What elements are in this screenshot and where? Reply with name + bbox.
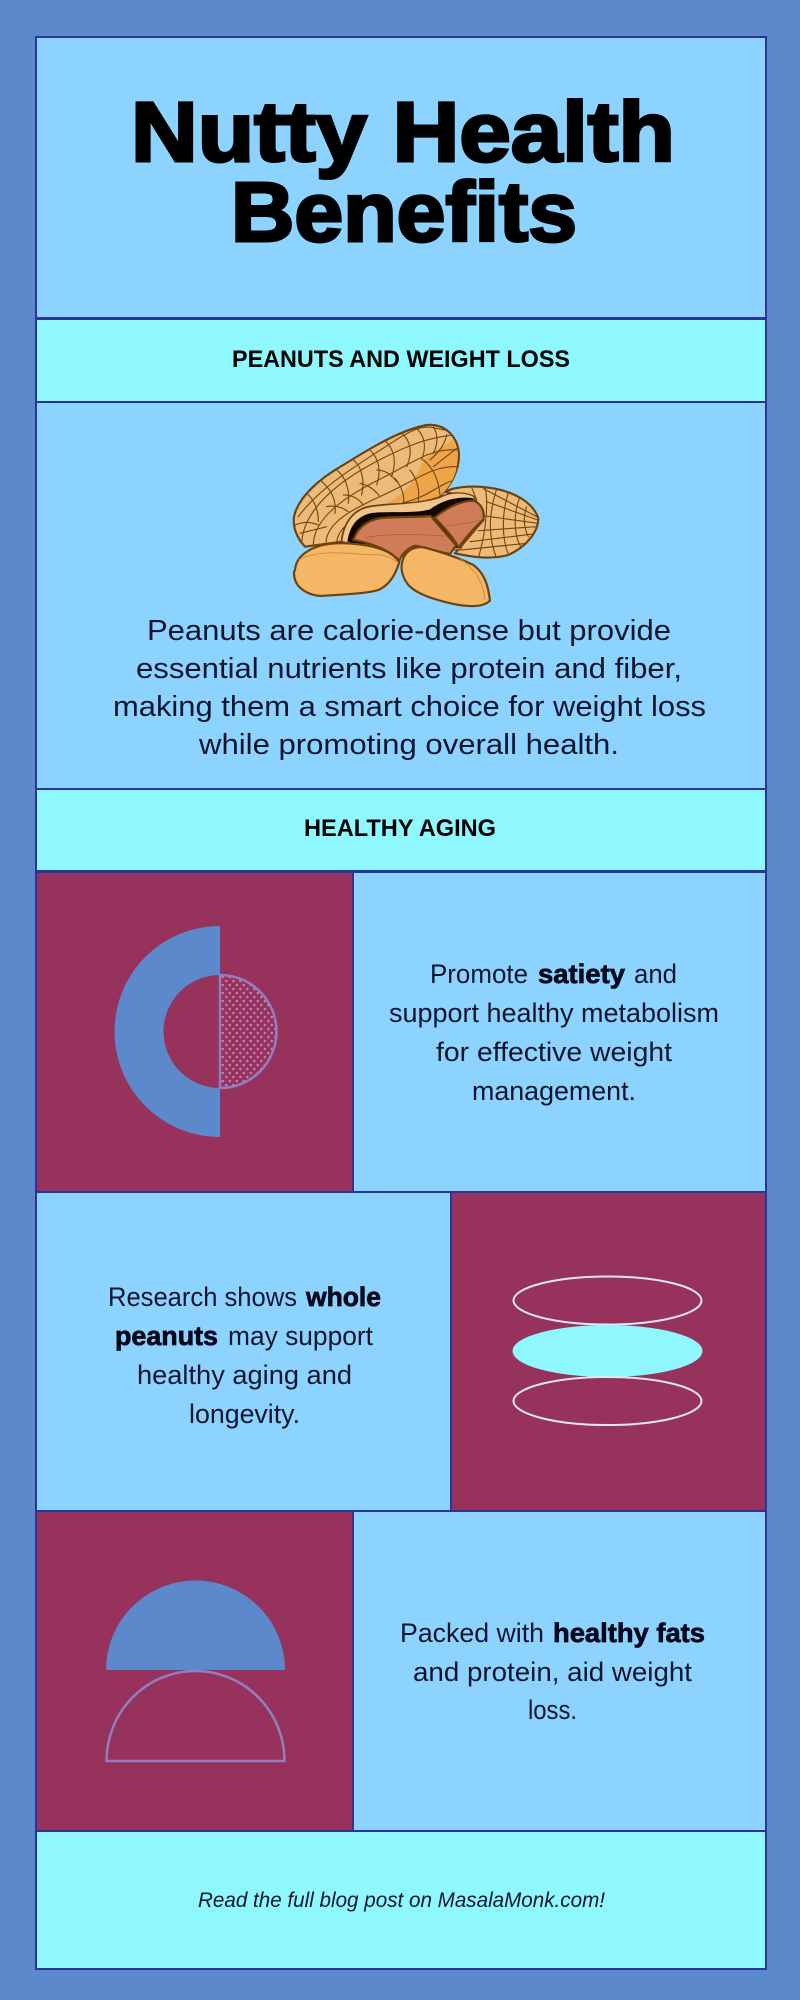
body text: while promoting overall health. bbox=[198, 729, 619, 761]
title line 2: Benefits bbox=[231, 165, 577, 259]
heading: peanuts and weight loss: PEANUTS AND WEIGHT LOSS bbox=[232, 346, 570, 373]
text tile: whole peanuts: longevity. bbox=[189, 1399, 300, 1429]
text tile: whole peanuts: peanuts bbox=[115, 1321, 218, 1351]
text tile: satiety: satiety bbox=[538, 959, 625, 989]
heading: healthy aging: HEALTHY AGING bbox=[304, 815, 496, 842]
panel: footer bbox=[36, 1831, 766, 1969]
image tile: half ring bbox=[36, 872, 353, 1192]
body text: essential nutrients like protein and fiber, bbox=[136, 653, 682, 685]
text tile: satiety: for effective weight bbox=[436, 1037, 673, 1067]
text tile: healthy fats: Packed with bbox=[400, 1618, 544, 1648]
text tile: healthy fats: loss. bbox=[528, 1695, 577, 1725]
body text: making them a smart choice for weight loss bbox=[113, 691, 706, 723]
text tile: healthy fats: healthy fats bbox=[553, 1618, 705, 1648]
title line 1: Nutty Health bbox=[131, 85, 675, 179]
panel: title bbox=[36, 37, 766, 318]
text tile: whole peanuts: may support bbox=[228, 1321, 373, 1351]
body text bbox=[113, 615, 706, 761]
text tile: whole peanuts: Research shows bbox=[108, 1282, 297, 1312]
icon: three stacked ellipses bbox=[512, 1276, 702, 1425]
text tile: satiety: and bbox=[634, 959, 677, 989]
body text: Peanuts are calorie-dense but provide bbox=[147, 615, 671, 647]
icon: half ring with dotted half circle bbox=[114, 926, 276, 1137]
panel: satiety row bbox=[36, 872, 766, 1192]
panel: healthy fats row bbox=[36, 1511, 766, 1831]
text tile: healthy fats bbox=[353, 1511, 766, 1831]
text tile: satiety bbox=[353, 872, 766, 1192]
text tile: whole peanuts bbox=[36, 1192, 451, 1511]
panel: healthy aging heading band bbox=[36, 789, 766, 871]
image tile: semicircles bbox=[36, 1511, 353, 1831]
panel: peanuts heading band bbox=[36, 319, 766, 402]
panel: peanuts and weight loss bbox=[36, 402, 766, 789]
text tile: satiety: management. bbox=[472, 1076, 636, 1106]
panel: whole peanuts row bbox=[36, 1192, 766, 1511]
text tile: whole peanuts: whole bbox=[305, 1282, 381, 1312]
footer text: Read the full blog post on MasalaMonk.com! bbox=[198, 1889, 605, 1912]
icon: peanut illustration bbox=[294, 425, 538, 606]
text tile: satiety: support healthy metabolism bbox=[389, 998, 719, 1028]
text tile: healthy fats: and protein, aid weight bbox=[413, 1657, 693, 1687]
text tile: satiety: Promote bbox=[430, 959, 528, 989]
text tile: whole peanuts: healthy aging and bbox=[137, 1360, 352, 1390]
icon: two semicircles bbox=[106, 1581, 285, 1761]
image tile: stacked ellipses bbox=[451, 1192, 766, 1511]
